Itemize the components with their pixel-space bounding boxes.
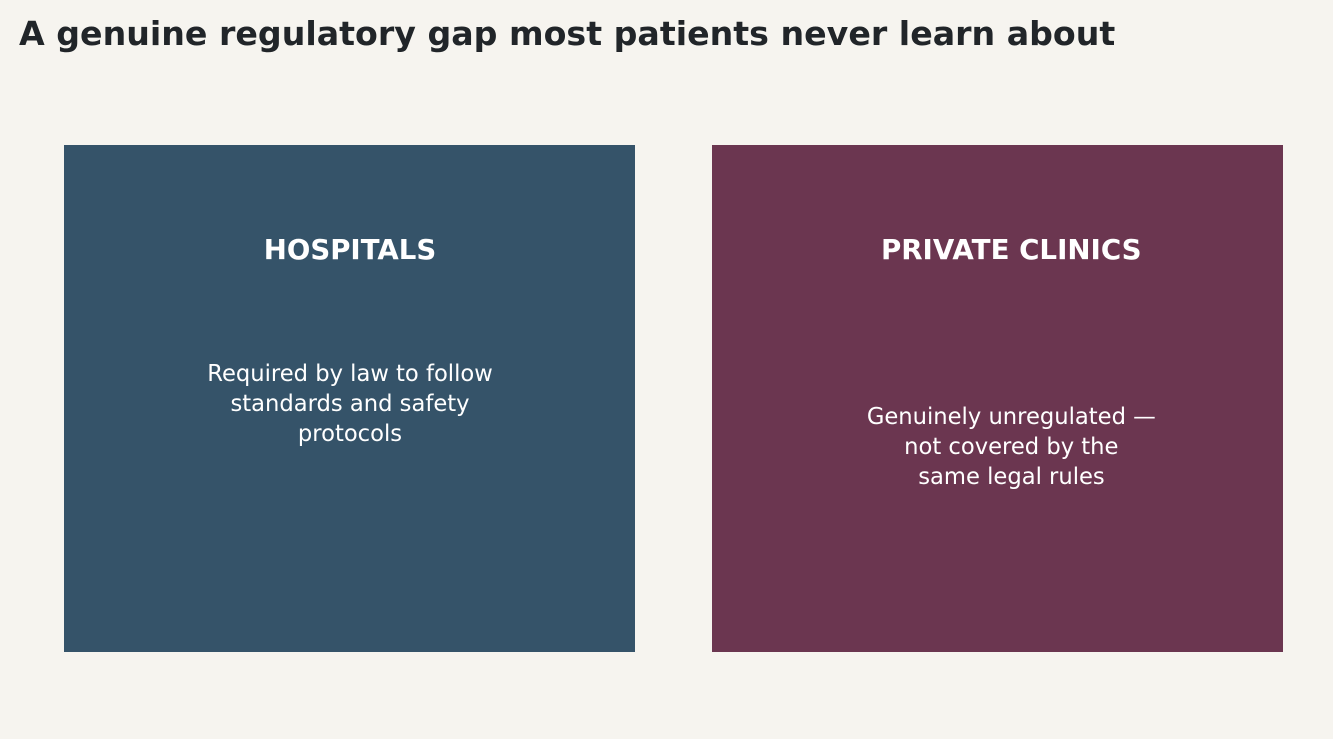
text block: hospitals description: protocols	[298, 421, 402, 447]
heading: private clinics: PRIVATE CLINICS	[881, 233, 1142, 266]
text block: private clinics description: Genuinely unregulated —	[867, 404, 1156, 430]
text block: hospitals description	[207, 361, 493, 447]
heading: hospitals: HOSPITALS	[264, 233, 436, 266]
text block: hospitals description: Required by law to follow	[207, 361, 493, 387]
text block: private clinics description: same legal rules	[918, 464, 1105, 490]
text block: private clinics description	[867, 404, 1156, 490]
panel: hospitals	[64, 145, 635, 652]
text block: hospitals description: standards and safety	[230, 391, 470, 417]
panel: private clinics	[712, 145, 1283, 652]
title: A genuine regulatory gap most patients never learn about	[19, 14, 1115, 53]
text block: private clinics description: not covered by the	[904, 434, 1118, 460]
